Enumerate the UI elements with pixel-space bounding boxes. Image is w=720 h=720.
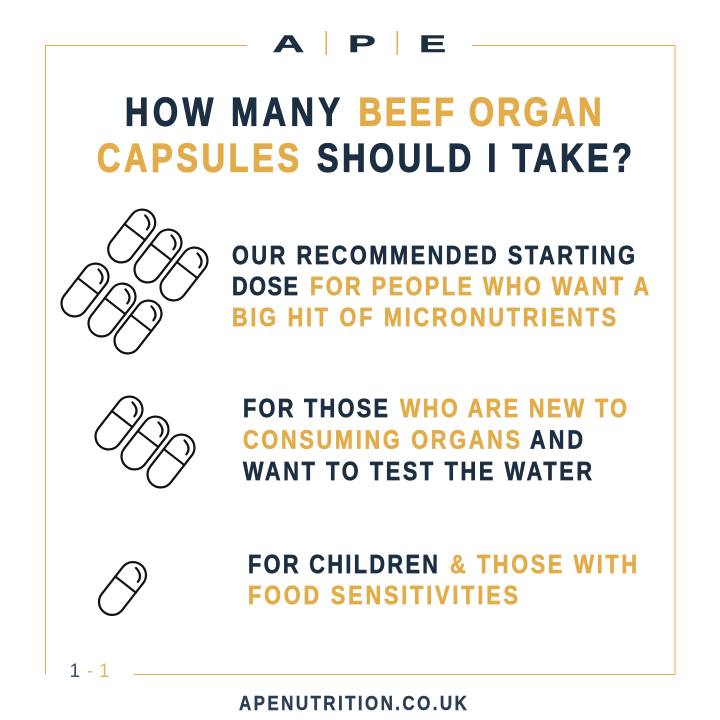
text: recommended starting dose xyxy=(232,242,649,332)
logo: APE: A xyxy=(272,30,304,57)
logo: APE: E xyxy=(419,31,446,58)
website url: APENUTRITION.CO.UK xyxy=(239,692,467,714)
title: SHOULD I TAKE? xyxy=(317,136,632,180)
page number: 1 xyxy=(70,661,80,682)
text: new to consuming organs: AND xyxy=(530,427,583,455)
page number xyxy=(70,661,110,682)
gold frame xyxy=(46,46,675,674)
page number: 1 xyxy=(99,661,110,682)
logo: APE xyxy=(272,30,446,58)
text: new to consuming organs: CONSUMING ORGANS xyxy=(243,427,520,455)
text: recommended starting dose: DOSE xyxy=(232,273,298,301)
icon: three capsules xyxy=(90,391,200,493)
text: children and food sensitivities: FOR CHILDREN xyxy=(248,551,438,579)
page number: - xyxy=(87,661,93,682)
title xyxy=(97,90,632,180)
text: children and food sensitivities xyxy=(248,551,637,610)
text: children and food sensitivities: FOOD SENSITIVITIES xyxy=(248,582,518,610)
text: children and food sensitivities: & THOSE WITH xyxy=(450,551,637,579)
text: new to consuming organs xyxy=(243,395,627,486)
logo: APE: P xyxy=(348,30,376,58)
text: recommended starting dose: BIG HIT OF MICRONUTRIENTS xyxy=(232,304,616,332)
text: new to consuming organs: FOR THOSE xyxy=(243,395,388,423)
icon: six capsules xyxy=(56,204,213,359)
text: recommended starting dose: FOR PEOPLE WHO WANT A xyxy=(310,273,649,301)
text: new to consuming organs: WANT TO TEST THE WATER xyxy=(243,458,592,486)
title: HOW MANY xyxy=(125,90,340,134)
text: new to consuming organs: WHO ARE NEW TO xyxy=(400,395,627,423)
icon: one capsule xyxy=(94,557,151,620)
title: CAPSULES xyxy=(97,136,299,180)
title: BEEF ORGAN xyxy=(358,90,601,134)
text: recommended starting dose: OUR RECOMMENDED STARTING xyxy=(232,242,635,270)
